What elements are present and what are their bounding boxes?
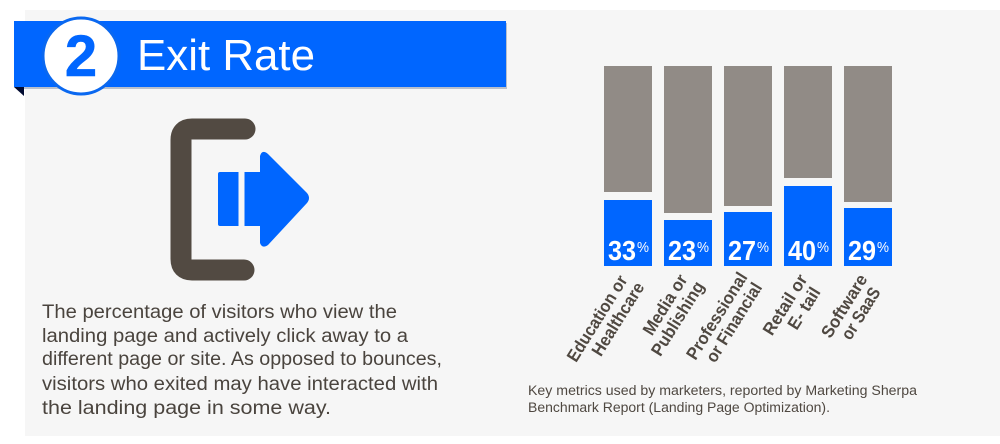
bar: Professional or Financial 27%: 27 — [728, 235, 756, 266]
title: Exit Rate — [137, 31, 315, 80]
label: Software or SaaS: or SaaS — [837, 283, 885, 343]
description text — [42, 302, 442, 419]
bar: Professional or Financial 27% — [724, 66, 772, 266]
bar: Media or Publishing 23% — [664, 66, 712, 266]
bar: Software or SaaS 29%: % — [877, 239, 889, 256]
bar: Media or Publishing 23%: 23 — [668, 235, 696, 266]
label: Education or Healthcare: Healthcare — [587, 278, 648, 360]
bar: Media or Publishing 23%: % — [697, 239, 709, 256]
number badge: 2 — [65, 24, 97, 89]
label: Education or Healthcare: Education or — [562, 271, 631, 365]
description text: visitors who exited may have interacted with — [42, 374, 438, 395]
heading banner — [14, 18, 507, 96]
bar: Software or SaaS 29%: 29 — [848, 235, 876, 266]
label: Software or SaaS: Software — [817, 270, 872, 341]
icon: exit door with arrow — [181, 129, 309, 270]
bar: Retail or E-tail 40%: % — [817, 239, 829, 256]
label: Professional or Financial: Professional — [682, 269, 751, 363]
bar chart — [604, 66, 892, 266]
description text: the landing page in some way. — [42, 398, 331, 419]
description text: different page or site. As opposed to bounces, — [42, 349, 442, 370]
label: Retail or E-tail: Retail or — [758, 270, 811, 339]
label: Media or Publishing: Media or — [638, 270, 691, 339]
bar: Education or Healthcare 33%: % — [637, 239, 649, 256]
source note: Benchmark Report (Landing Page Optimization). — [528, 400, 830, 415]
description text: The percentage of visitors who view the — [42, 302, 397, 323]
description text: landing page and actively click away to a — [42, 326, 408, 347]
bar: Retail or E-tail 40% — [784, 66, 832, 266]
bar: Education or Healthcare 33%: 33 — [608, 235, 636, 266]
category labels — [562, 268, 887, 375]
label: Retail or E-tail: E- tail — [783, 283, 825, 333]
label: Professional or Financial: or Financial — [701, 279, 766, 366]
bar: Software or SaaS 29% — [844, 66, 892, 266]
source note: Key metrics used by marketers, reported by Marketing Sherpa — [528, 383, 918, 398]
bar: Retail or E-tail 40%: 40 — [788, 235, 816, 266]
number badge — [43, 18, 119, 94]
source note — [528, 383, 918, 415]
bar: Education or Healthcare 33% — [604, 66, 652, 266]
label: Media or Publishing: Publishing — [647, 278, 708, 359]
bar: Professional or Financial 27%: % — [757, 239, 769, 256]
